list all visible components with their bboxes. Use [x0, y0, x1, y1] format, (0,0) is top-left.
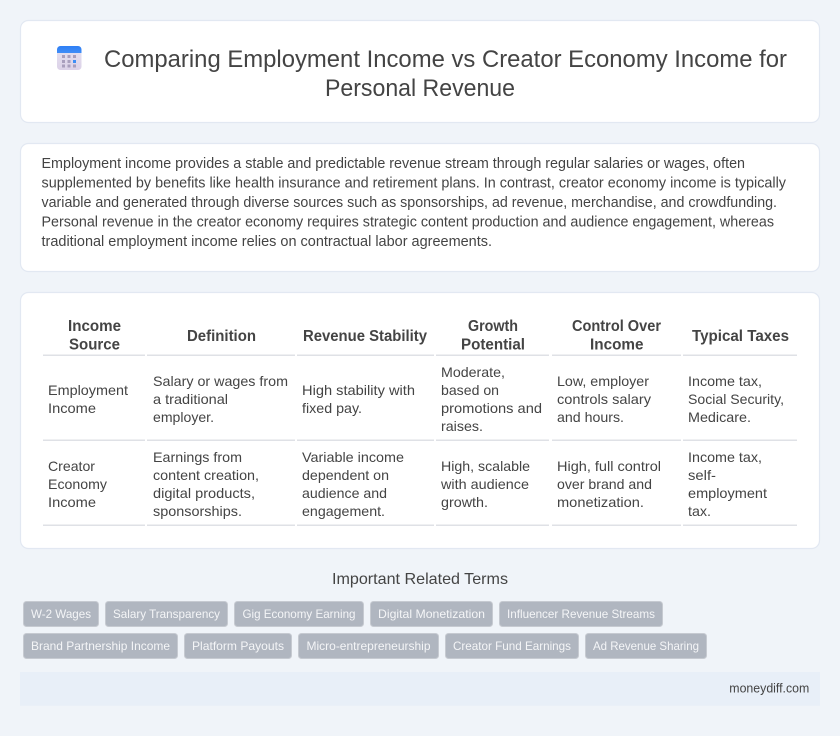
text block: summary: Employment income provides a stable and predictable revenue stream through regular salaries or wages, often	[42, 156, 745, 172]
table row: creator economy income: dependent on	[302, 467, 389, 483]
heading: important related terms: Important Related Terms	[332, 571, 508, 588]
table row: employment income: Moderate,	[441, 364, 505, 380]
table row: employment income: fixed pay.	[302, 400, 362, 416]
tag: Gig Economy Earning: Gig Economy Earning	[242, 607, 356, 621]
table row: creator economy income: tax.	[688, 503, 711, 519]
text block: summary: variable and generated through diverse sources such as sponsorships, ad revenue, merchandise, and crowdfunding.	[42, 195, 777, 211]
table row: creator economy income: High, full control	[557, 458, 661, 474]
title: Comparing Employment Income vs Creator Economy Income for	[104, 46, 787, 73]
table row: employment income: Social Security,	[688, 391, 784, 407]
table row: employment income: Employment	[48, 382, 128, 398]
tag: Salary Transparency: Salary Transparency	[113, 607, 220, 621]
tag: Micro-entrepreneurship: Micro-entrepreneurship	[306, 639, 431, 653]
tag: W-2 Wages	[24, 602, 98, 626]
table row: creator economy income: growth.	[441, 494, 488, 510]
table header row: Revenue Stability	[303, 328, 427, 345]
table row: creator economy income: over brand and	[557, 476, 652, 492]
table header row: Source	[69, 336, 120, 354]
tag: W-2 Wages: W-2 Wages	[31, 607, 91, 621]
table header row: Control Over	[572, 318, 661, 335]
table row: employment income: raises.	[441, 418, 483, 434]
table row: employment income: Medicare.	[688, 409, 751, 425]
table header row: Growth	[468, 318, 518, 335]
table header row: Definition	[187, 328, 256, 345]
table row: creator economy income: Income	[48, 494, 96, 510]
table row: creator economy income: Economy	[48, 476, 107, 492]
table header row: Income	[68, 318, 121, 335]
tag: Ad Revenue Sharing: Ad Revenue Sharing	[593, 639, 699, 653]
tag: Salary Transparency	[106, 602, 228, 626]
tag: Platform Payouts	[184, 634, 292, 658]
title: Personal Revenue	[325, 75, 515, 102]
table header row: Potential	[461, 336, 525, 354]
table row: employment income: a traditional	[153, 391, 228, 407]
table row: creator economy income: Income tax,	[688, 449, 762, 465]
table row: creator economy income: with audience	[440, 476, 529, 492]
table row: employment income: High stability with	[302, 382, 415, 398]
footer: moneydiff.com	[729, 682, 809, 696]
text block: summary	[42, 156, 787, 250]
table row: employment income: and hours.	[557, 409, 624, 425]
tag: Digital Monetization	[370, 602, 492, 626]
tag: Brand Partnership Income: Brand Partnership Income	[31, 639, 170, 653]
table row: employment income: employer.	[153, 409, 214, 425]
tag: Platform Payouts: Platform Payouts	[192, 639, 284, 653]
panel: comparison table	[20, 292, 820, 548]
title	[104, 46, 787, 102]
table row: creator economy income: High, scalable	[441, 458, 530, 474]
table row: creator economy income: content creation,	[153, 467, 259, 483]
table row: creator economy income: Earnings from	[153, 449, 242, 465]
table row: creator economy income: engagement.	[302, 503, 385, 519]
table row: employment income: controls salary	[557, 391, 651, 407]
table header row: Typical Taxes	[692, 328, 789, 345]
table row: employment income	[48, 364, 784, 434]
tag: Influencer Revenue Streams: Influencer Revenue Streams	[507, 607, 655, 621]
table row: creator economy income: Variable income	[302, 449, 404, 465]
table row: creator economy income	[48, 449, 767, 519]
table header row: Income	[590, 336, 644, 354]
table header row	[68, 318, 789, 354]
table row: creator economy income: sponsorships.	[153, 503, 242, 519]
table row: employment income: promotions and	[441, 400, 542, 416]
table row: employment income: Income	[48, 400, 96, 416]
text block: summary: supplemented by benefits like health insurance and retirement plans. In contrast, creator economy income is typically	[42, 176, 787, 192]
tag: Brand Partnership Income	[24, 634, 178, 658]
text block: summary: Personal revenue in the creator economy requires strategic content production and audience engagement, whereas	[42, 214, 774, 230]
tag: Micro-entrepreneurship	[298, 634, 438, 658]
tag: Influencer Revenue Streams	[500, 602, 662, 626]
panel: related term tags	[24, 602, 706, 658]
table row: creator economy income: digital products,	[153, 485, 255, 501]
footer	[20, 672, 820, 706]
panel: summary paragraph	[20, 144, 820, 272]
text block: summary: traditional employment income relies on contractual labor agreements.	[42, 234, 492, 250]
table row: creator economy income: employment	[688, 485, 767, 501]
table row: employment income: Salary or wages from	[153, 373, 288, 389]
table row: employment income: Low, employer	[557, 373, 649, 389]
tag: Gig Economy Earning	[234, 602, 364, 626]
table row: creator economy income: monetization.	[557, 494, 644, 510]
tag: Ad Revenue Sharing	[586, 634, 706, 658]
table row: creator economy income: audience and	[302, 485, 387, 501]
table row: employment income: based on	[441, 382, 499, 398]
panel: title header	[20, 20, 820, 122]
tag: Creator Fund Earnings: Creator Fund Earnings	[453, 639, 571, 653]
tag: Digital Monetization: Digital Monetization	[378, 607, 485, 621]
table row: creator economy income: self-	[688, 467, 716, 483]
tag: Creator Fund Earnings	[446, 634, 578, 658]
table row: creator economy income: Creator	[48, 458, 95, 474]
table row: employment income: Income tax,	[688, 373, 762, 389]
icon: calendar	[57, 46, 82, 70]
